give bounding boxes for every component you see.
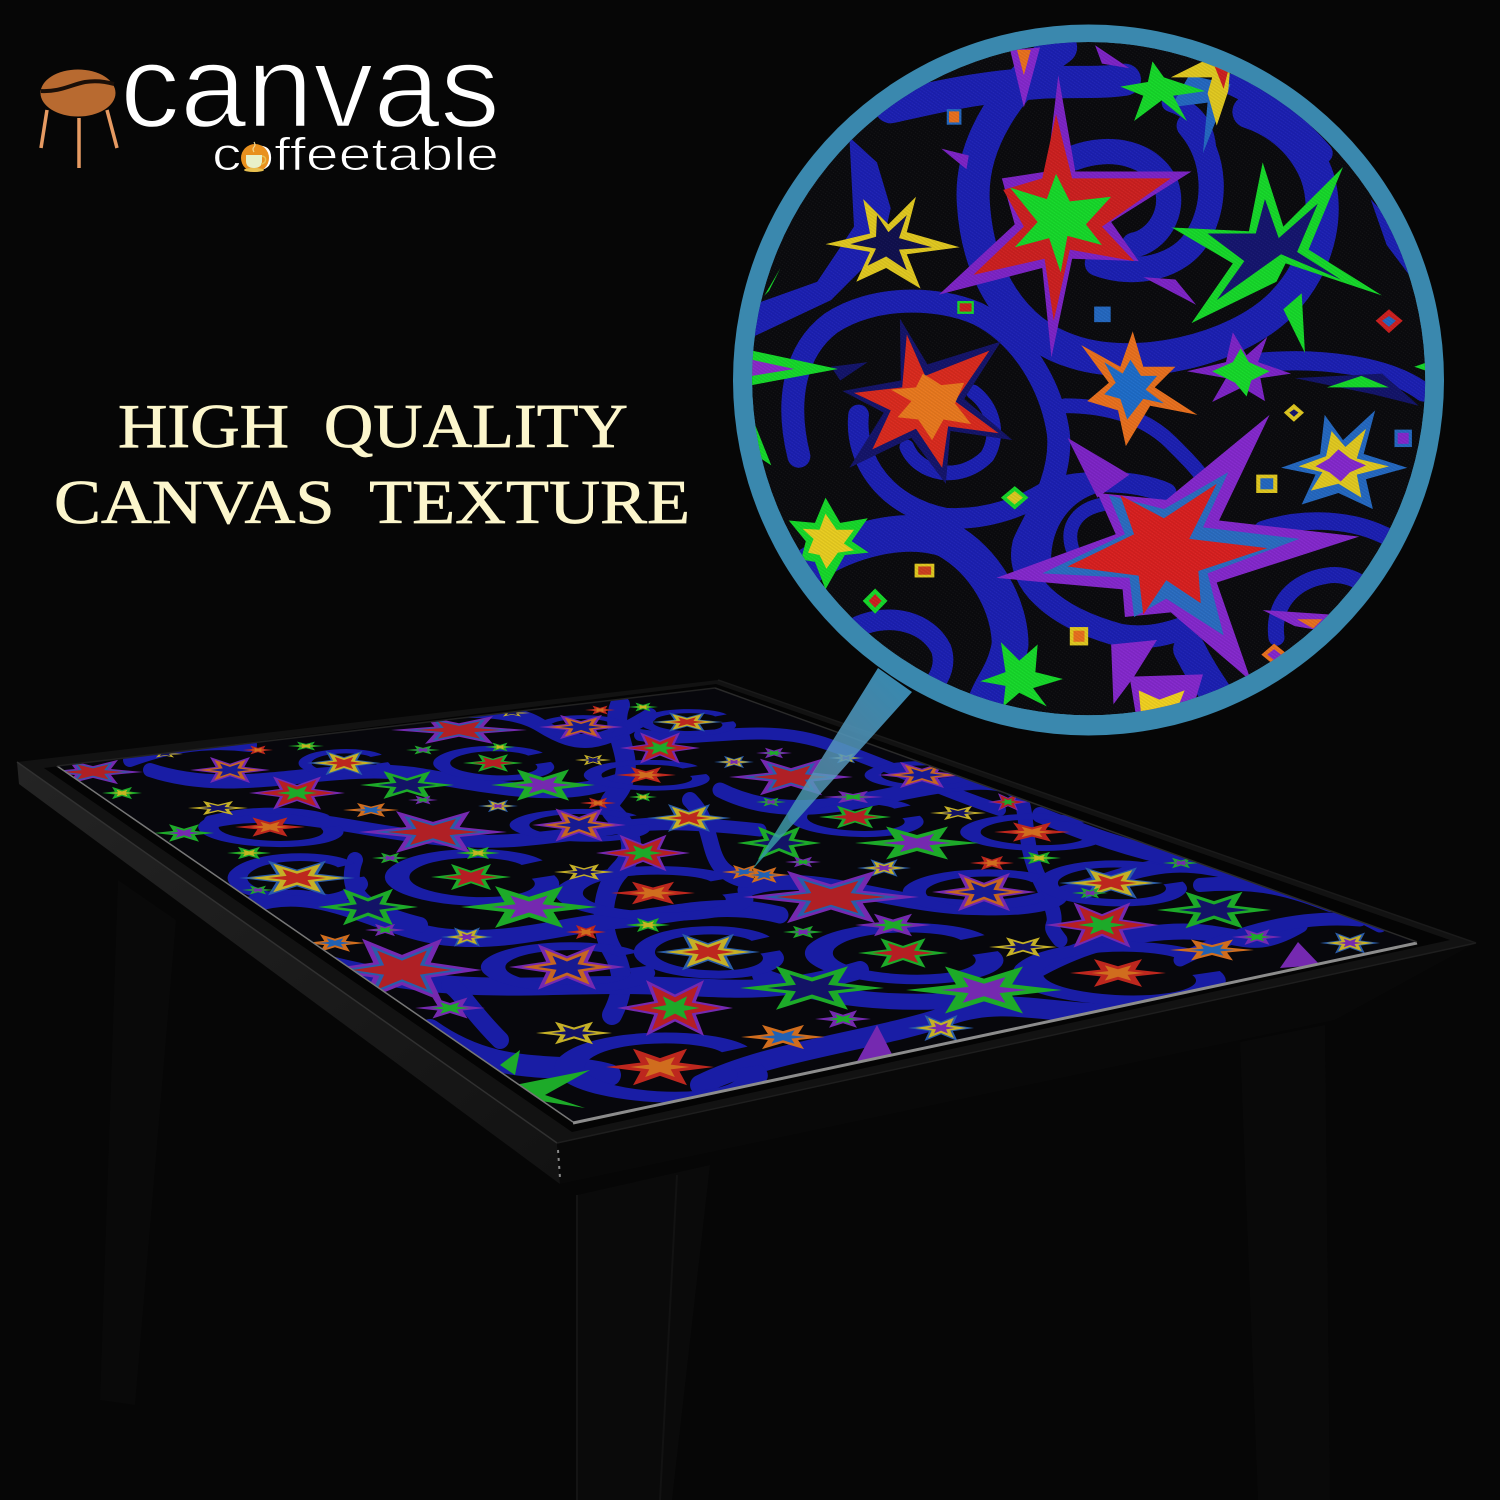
- swirl bands on table: [130, 705, 1380, 1085]
- logo: coffeetable: [212, 128, 499, 180]
- heading: CANVAS TEXTURE: [54, 469, 690, 537]
- table top canvas print: [43, 688, 1417, 1122]
- star: yellow outline: [826, 197, 960, 289]
- canvas weave texture: [752, 42, 1425, 715]
- star: purple green small: [1187, 332, 1291, 402]
- heading: HIGH QUALITY: [118, 393, 628, 461]
- star: big purple red: [996, 415, 1359, 718]
- star: orange blue: [1081, 331, 1197, 446]
- star: green yellow: [789, 498, 869, 589]
- logo wordmark: canvas: [120, 21, 500, 153]
- star: green bottom: [980, 642, 1063, 707]
- logo: [40, 21, 500, 180]
- heading: [54, 393, 690, 537]
- table edge highlights: [57, 688, 1417, 1123]
- table legs: [100, 880, 1330, 1500]
- star: red green purple: [939, 75, 1191, 358]
- callout pointer: [752, 668, 912, 870]
- stars: top edge: [1010, 48, 1231, 153]
- stars on table: [43, 703, 1380, 1108]
- small squares and diamonds: [863, 109, 1412, 665]
- star: red orange: [843, 318, 1012, 484]
- table frame: [17, 680, 1476, 1184]
- star: gold blue: [1281, 410, 1407, 509]
- star: green outline: [1172, 162, 1382, 323]
- purple and green shards: [753, 45, 1428, 631]
- logo icon: coffee cup: [241, 142, 269, 172]
- lens swirls: [793, 48, 1423, 700]
- star: green arrow: [752, 351, 868, 385]
- magnifier callout: [733, 24, 1444, 736]
- swirl rings on table: [208, 711, 1211, 1097]
- logo icon: coffee bean table: [40, 70, 117, 168]
